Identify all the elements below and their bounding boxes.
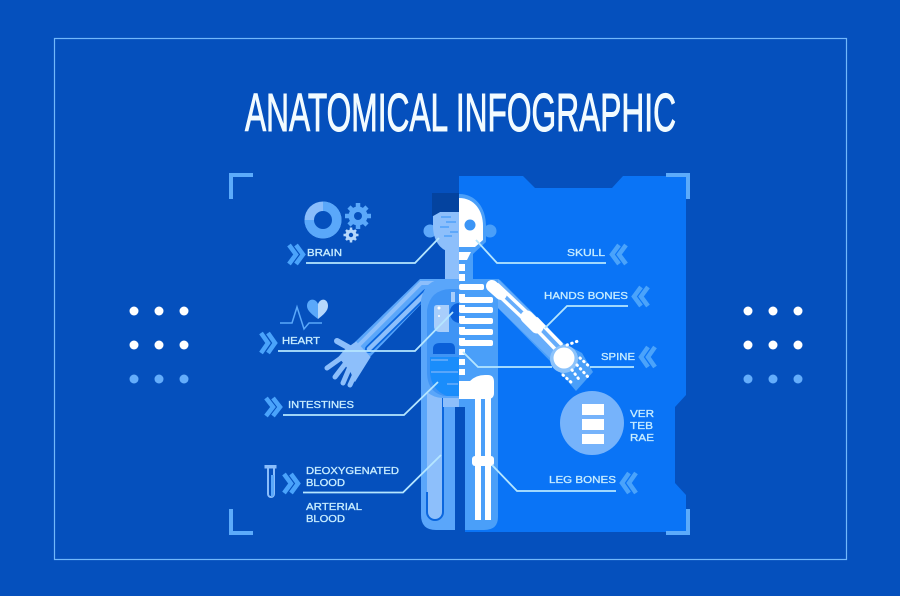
icon: brain donut — [304, 202, 342, 239]
pelvis — [459, 375, 494, 399]
label: intestines: INTESTINES — [288, 399, 354, 411]
label: arterial blood: ARTERIAL — [306, 501, 362, 513]
leg bones — [472, 398, 494, 520]
label: vertebrae: VER — [630, 408, 654, 420]
label: intestines — [266, 382, 438, 416]
hair — [432, 193, 459, 216]
arm bones — [492, 285, 561, 350]
icon: pulse line — [280, 307, 322, 329]
heart organ — [450, 303, 459, 323]
figure: anatomical body — [327, 193, 593, 532]
left leg — [421, 398, 455, 530]
label: deoxygenated blood: BLOOD — [306, 477, 345, 489]
icon: heart — [307, 300, 328, 319]
dots: left grid — [130, 306, 188, 384]
label: vertebrae — [630, 408, 654, 444]
stomach — [433, 343, 455, 354]
label: spine — [463, 347, 655, 367]
label: deoxygenated blood: DEOXYGENATED — [306, 465, 399, 477]
label: leg bones — [492, 465, 636, 493]
spine — [459, 264, 465, 375]
label: hands bones — [544, 287, 648, 328]
icon: small gear — [344, 228, 358, 242]
label: skull: SKULL — [567, 247, 605, 259]
wrist and finger bones — [550, 340, 591, 383]
label: leg bones: LEG BONES — [549, 474, 616, 486]
outer frame — [54, 38, 846, 560]
skull — [459, 198, 483, 247]
label: spine: SPINE — [601, 351, 635, 363]
label: arterial blood — [306, 501, 362, 525]
label: arterial blood: BLOOD — [306, 513, 345, 525]
label: brain — [289, 238, 439, 264]
label: hands bones: HANDS BONES — [544, 290, 628, 302]
lung — [434, 305, 449, 332]
intestines — [430, 357, 459, 396]
icon: large gear — [345, 203, 371, 229]
label: vertebrae: TEB — [630, 420, 653, 432]
label: heart: HEART — [282, 335, 321, 347]
vertebrae circle — [560, 391, 624, 455]
ribs — [459, 284, 493, 346]
corner brackets — [231, 175, 688, 533]
label: deoxygenated blood — [284, 455, 441, 493]
left half: arm — [355, 279, 445, 357]
right half body — [459, 194, 486, 279]
label: brain: BRAIN — [307, 247, 342, 259]
brain pattern — [440, 217, 458, 236]
left torso — [421, 279, 459, 407]
label: skull — [476, 240, 626, 264]
panel: right blue background — [459, 176, 686, 532]
leg gap — [455, 407, 465, 532]
dots: right grid — [744, 306, 802, 384]
label: vertebrae: RAE — [630, 432, 654, 444]
left head — [445, 240, 460, 285]
left hand — [327, 341, 370, 385]
label: heart — [261, 312, 453, 353]
icon: test tube — [264, 465, 276, 497]
